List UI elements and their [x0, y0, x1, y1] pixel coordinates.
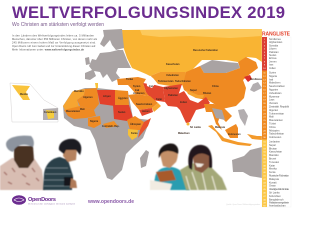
region: Japan [250, 82, 262, 92]
country names: Usbekistan [269, 92, 282, 95]
country names: Mali [269, 116, 274, 119]
country names: Libyen [269, 48, 277, 51]
region: Nepal and Bhutan [186, 90, 204, 98]
country names: Nigeria [269, 75, 278, 78]
region: Mexico [12, 85, 30, 100]
rank numbers: 46 [263, 192, 266, 194]
subtitle: Wo Christen am stärksten verfolgt werden [12, 22, 104, 28]
region: Caspian Sea [146, 76, 155, 88]
map labels: Sudan [118, 111, 126, 114]
rank numbers: 1 [264, 39, 266, 41]
panel: ranking list [262, 32, 291, 208]
region: Algeria [77, 88, 99, 110]
country names: Myanmar [269, 95, 280, 98]
country names: Ägypten [269, 88, 279, 92]
rank numbers: 45 [263, 189, 266, 191]
country names: Kasachstan [269, 151, 283, 154]
region: Kenya [128, 129, 138, 140]
logo mark [12, 195, 26, 205]
rank numbers: 40 [263, 172, 266, 174]
country names: Turkmenistan [269, 112, 285, 115]
country names: Mauretanien [269, 119, 284, 122]
region: Iran [143, 83, 165, 102]
rank numbers: 12 [263, 76, 266, 78]
number strip: 11 to 30 [262, 70, 267, 140]
rank numbers: 17 [263, 93, 266, 95]
country names: Türkei [269, 122, 276, 126]
region: Arctic band [140, 29, 262, 38]
region: Yemen [139, 108, 153, 116]
region: Madagascar [140, 150, 149, 168]
country names: Brunei [269, 158, 277, 160]
footer: website: www.opendoors.de [87, 199, 134, 205]
country names: Iran [269, 64, 274, 67]
rank numbers: 4 [264, 49, 266, 51]
map labels: Afghanistan [164, 87, 178, 90]
rank numbers: 42 [263, 179, 266, 181]
map labels: Algerien [83, 96, 93, 99]
region: Sumatra and Java [208, 125, 252, 146]
region: Libya [97, 90, 115, 106]
region: Sudan [113, 105, 133, 121]
rank numbers: 22 [263, 110, 266, 112]
rank numbers: 8 [264, 61, 266, 63]
region: Thailand grey [212, 108, 225, 120]
rank numbers: 31 [263, 142, 266, 144]
country names: Kenia [269, 171, 276, 174]
country names: Sudan [269, 54, 277, 57]
region: Sri Lanka [186, 122, 190, 126]
region: Africa [63, 88, 150, 180]
rank numbers: 11 [263, 72, 266, 74]
map labels: Kolumbien [44, 111, 57, 114]
region: Central Asia [150, 72, 186, 86]
region: Mali and Niger [64, 106, 96, 119]
country names: Katar [269, 164, 275, 167]
region: Morocco and Mauritania [63, 89, 85, 112]
rank numbers: 30 [263, 137, 266, 139]
country names: Zentralafr. Republik [269, 106, 290, 108]
map labels: Äthiopien [130, 123, 142, 126]
map labels: Sri Lanka [190, 126, 201, 129]
map labels: Irak [135, 89, 140, 92]
rank numbers: 28 [263, 130, 266, 132]
country names: Indien [269, 67, 276, 70]
rank numbers [263, 39, 266, 208]
map labels: Zentralafr. Rep. [102, 125, 120, 128]
map labels: Marokko [74, 90, 84, 93]
rank numbers: 37 [263, 162, 266, 164]
country names: Vereinigte Arab. Emirate [269, 188, 290, 191]
rank numbers: 39 [263, 169, 266, 171]
region: Turkey [117, 77, 146, 85]
region: Mongolia [200, 60, 240, 74]
region: Central African Republic [103, 121, 118, 128]
map labels: Nigeria [90, 120, 99, 123]
rank numbers: 49 [263, 203, 266, 205]
map labels: Bhutan [203, 92, 212, 95]
list background [262, 37, 291, 207]
photo: praying boy [43, 139, 81, 190]
map labels: Katar [156, 98, 162, 101]
map labels: Usbekistan [166, 74, 179, 77]
region: Arabian Peninsula [128, 94, 158, 110]
region: Somalia [138, 118, 151, 138]
rank numbers: 7 [264, 58, 266, 60]
country names: Tunesien [269, 161, 280, 164]
map labels: Malediven [178, 132, 190, 135]
rank numbers: 5 [264, 52, 266, 54]
map labels: Mauretanien [66, 110, 81, 113]
region: Tunisia [95, 83, 98, 89]
country names: Kuwait [269, 181, 277, 184]
map labels: Malaysia [215, 126, 226, 129]
rank numbers: 44 [263, 186, 266, 188]
rank numbers: 38 [263, 165, 266, 167]
country names: Bangladesch [269, 198, 284, 201]
region: Russia and Kazakhstan [122, 29, 262, 76]
rank numbers: 3 [264, 45, 266, 47]
logo wordmark: OpenDoors [28, 197, 56, 203]
region: Ethiopia [127, 116, 144, 130]
intro text block: 245 Millionen einem hohen Maß an Verfolgung ausgesetzt sind. [12, 40, 96, 44]
map labels: Kenia [131, 132, 138, 135]
map labels: Kasachstan [166, 63, 180, 66]
map labels: Mali [80, 108, 85, 111]
country names: Malaysia [269, 178, 279, 181]
rank numbers: 25 [263, 120, 266, 122]
country names: Jordanien [269, 140, 281, 144]
map labels: Russische Föderation [193, 49, 219, 52]
photo: woman with headscarf [0, 136, 45, 190]
map labels: Indonesien [228, 133, 241, 136]
country names: Nepal [269, 144, 276, 147]
rank numbers: 26 [263, 124, 266, 126]
heading: Rangliste: RANGLISTE [262, 32, 291, 38]
number strip: top 10 [262, 37, 267, 70]
title: WELTVERFOLGUNGSINDEX 2019 [12, 3, 285, 22]
map labels: Libyen [103, 95, 111, 98]
country names: China [269, 126, 276, 129]
map labels: Indien [180, 101, 188, 104]
rank numbers: 27 [263, 127, 266, 129]
footer: logo [12, 195, 75, 206]
region: China [182, 57, 258, 109]
intro text block: In den Ländern des Weltverfolgungsindex leben ca. 5 Milliarden [12, 34, 95, 38]
rank numbers: 6 [264, 55, 266, 57]
rank numbers: 20 [263, 103, 266, 105]
rank numbers: 29 [263, 134, 266, 136]
country names: Pakistan [269, 51, 279, 54]
rank numbers: 34 [263, 152, 266, 154]
region: Oman [152, 103, 161, 112]
region: Scandinavia [100, 29, 124, 50]
rank numbers: 41 [263, 176, 266, 178]
country names: Kolumbien [269, 195, 281, 198]
map labels: Türkei [126, 78, 134, 81]
intro text block: Mehr Informationen unter: www.weltverfolgungsindex.de [12, 48, 85, 52]
region: India [176, 91, 210, 123]
rank numbers: 36 [263, 158, 266, 160]
country names: Laos [269, 99, 275, 102]
rank numbers: 48 [263, 199, 266, 201]
country names: Irak [269, 78, 274, 81]
panel: Mexico inset [10, 83, 58, 122]
rank numbers: 16 [263, 90, 266, 92]
rank numbers: 35 [263, 155, 266, 157]
rank numbers: 2 [264, 42, 266, 44]
region: Colombia [43, 108, 58, 120]
rank numbers: 33 [263, 148, 266, 150]
map labels [20, 49, 263, 136]
map labels: Turkmenistan [158, 80, 174, 83]
country names: Jemen [269, 60, 277, 63]
country names: Tadschikistan [269, 133, 285, 136]
region: Philippines [238, 109, 248, 126]
country names: Russische Föderation [269, 174, 290, 178]
country names: Syrien [269, 72, 277, 74]
map labels: Nordkorea [250, 78, 263, 81]
map labels: China [212, 85, 219, 88]
region: Syria and Iraq [128, 83, 150, 96]
region: Nigeria [88, 116, 101, 128]
region: Borneo [225, 124, 238, 138]
map labels: Iran [149, 85, 154, 88]
logo tagline: Im Dienst der verfolgten Christen weltweit [28, 203, 75, 206]
rank numbers: 21 [263, 106, 266, 108]
region: Afghanistan and Pakistan [163, 84, 184, 107]
region: Europe mainland [85, 50, 131, 82]
rank numbers: 19 [263, 100, 266, 102]
country names: Somalia [269, 44, 279, 47]
intro text block [12, 34, 98, 52]
country names: Indonesien [269, 136, 282, 139]
region: Australia [232, 147, 262, 178]
country names: Vietnam [269, 102, 278, 105]
rank numbers: 9 [264, 65, 266, 67]
rank numbers: 14 [263, 83, 266, 85]
region: Sulawesi and Papua [247, 134, 262, 140]
country names: Afghanistan [269, 41, 283, 44]
intro text block: Open Doors ruft zum Gebet und zur Unterstützung dieser Christen auf. [12, 44, 96, 48]
country names: Algerien [269, 109, 279, 112]
country names: Saudi-Arabien [269, 85, 285, 88]
country names: Eritrea [269, 57, 277, 60]
region: North Korea [244, 75, 252, 82]
photo: girl [150, 144, 190, 190]
number strip: 31 to 50 [262, 140, 267, 207]
rank numbers: 47 [263, 196, 266, 198]
country names: Aserbaidschan [269, 205, 286, 208]
rank numbers: 24 [263, 117, 266, 119]
map labels: Mexiko [20, 93, 29, 96]
country names: Palästinensergebiete [269, 202, 290, 205]
country names: Bhutan [269, 147, 278, 150]
country names: Mexiko [269, 168, 278, 171]
rank numbers: 43 [263, 182, 266, 184]
country names: Marokko [269, 154, 279, 157]
map labels: Ägypten [118, 97, 128, 100]
rank numbers: 13 [263, 79, 266, 81]
map labels: Saudi-Arabien [136, 103, 153, 106]
footer: credit: Quelle: Open Doors Weltverfolgungsindex [226, 203, 260, 206]
intro text block: Menschen, darunter über 650 Millionen Christen, von denen mehr als [12, 37, 98, 41]
country names: Nordkorea [269, 38, 281, 41]
rank numbers: 23 [263, 113, 266, 115]
map labels: Jordanien [133, 92, 145, 95]
country names: Oman [269, 185, 276, 188]
map labels: Tadschikistan [175, 80, 191, 83]
map [10, 29, 263, 180]
rank numbers: 18 [263, 96, 266, 98]
region: Egypt [115, 90, 129, 105]
country names: Äthiopien [269, 129, 280, 132]
region: Southeast Asia [204, 104, 232, 130]
map labels: Syrien [133, 85, 141, 88]
photo: smiling woman [180, 145, 227, 190]
country names [269, 38, 290, 208]
rank numbers: 15 [263, 86, 266, 88]
rank numbers: 50 [263, 206, 266, 208]
map labels: Pakistan [168, 94, 178, 97]
map labels: Jemen [142, 110, 150, 113]
rank numbers: 10 [263, 68, 266, 70]
map labels: Nepal [190, 89, 197, 92]
region: Britain [85, 57, 90, 65]
rank numbers: 32 [263, 145, 266, 147]
country names: Malediven [269, 82, 281, 85]
country names: Sri Lanka [269, 192, 280, 194]
